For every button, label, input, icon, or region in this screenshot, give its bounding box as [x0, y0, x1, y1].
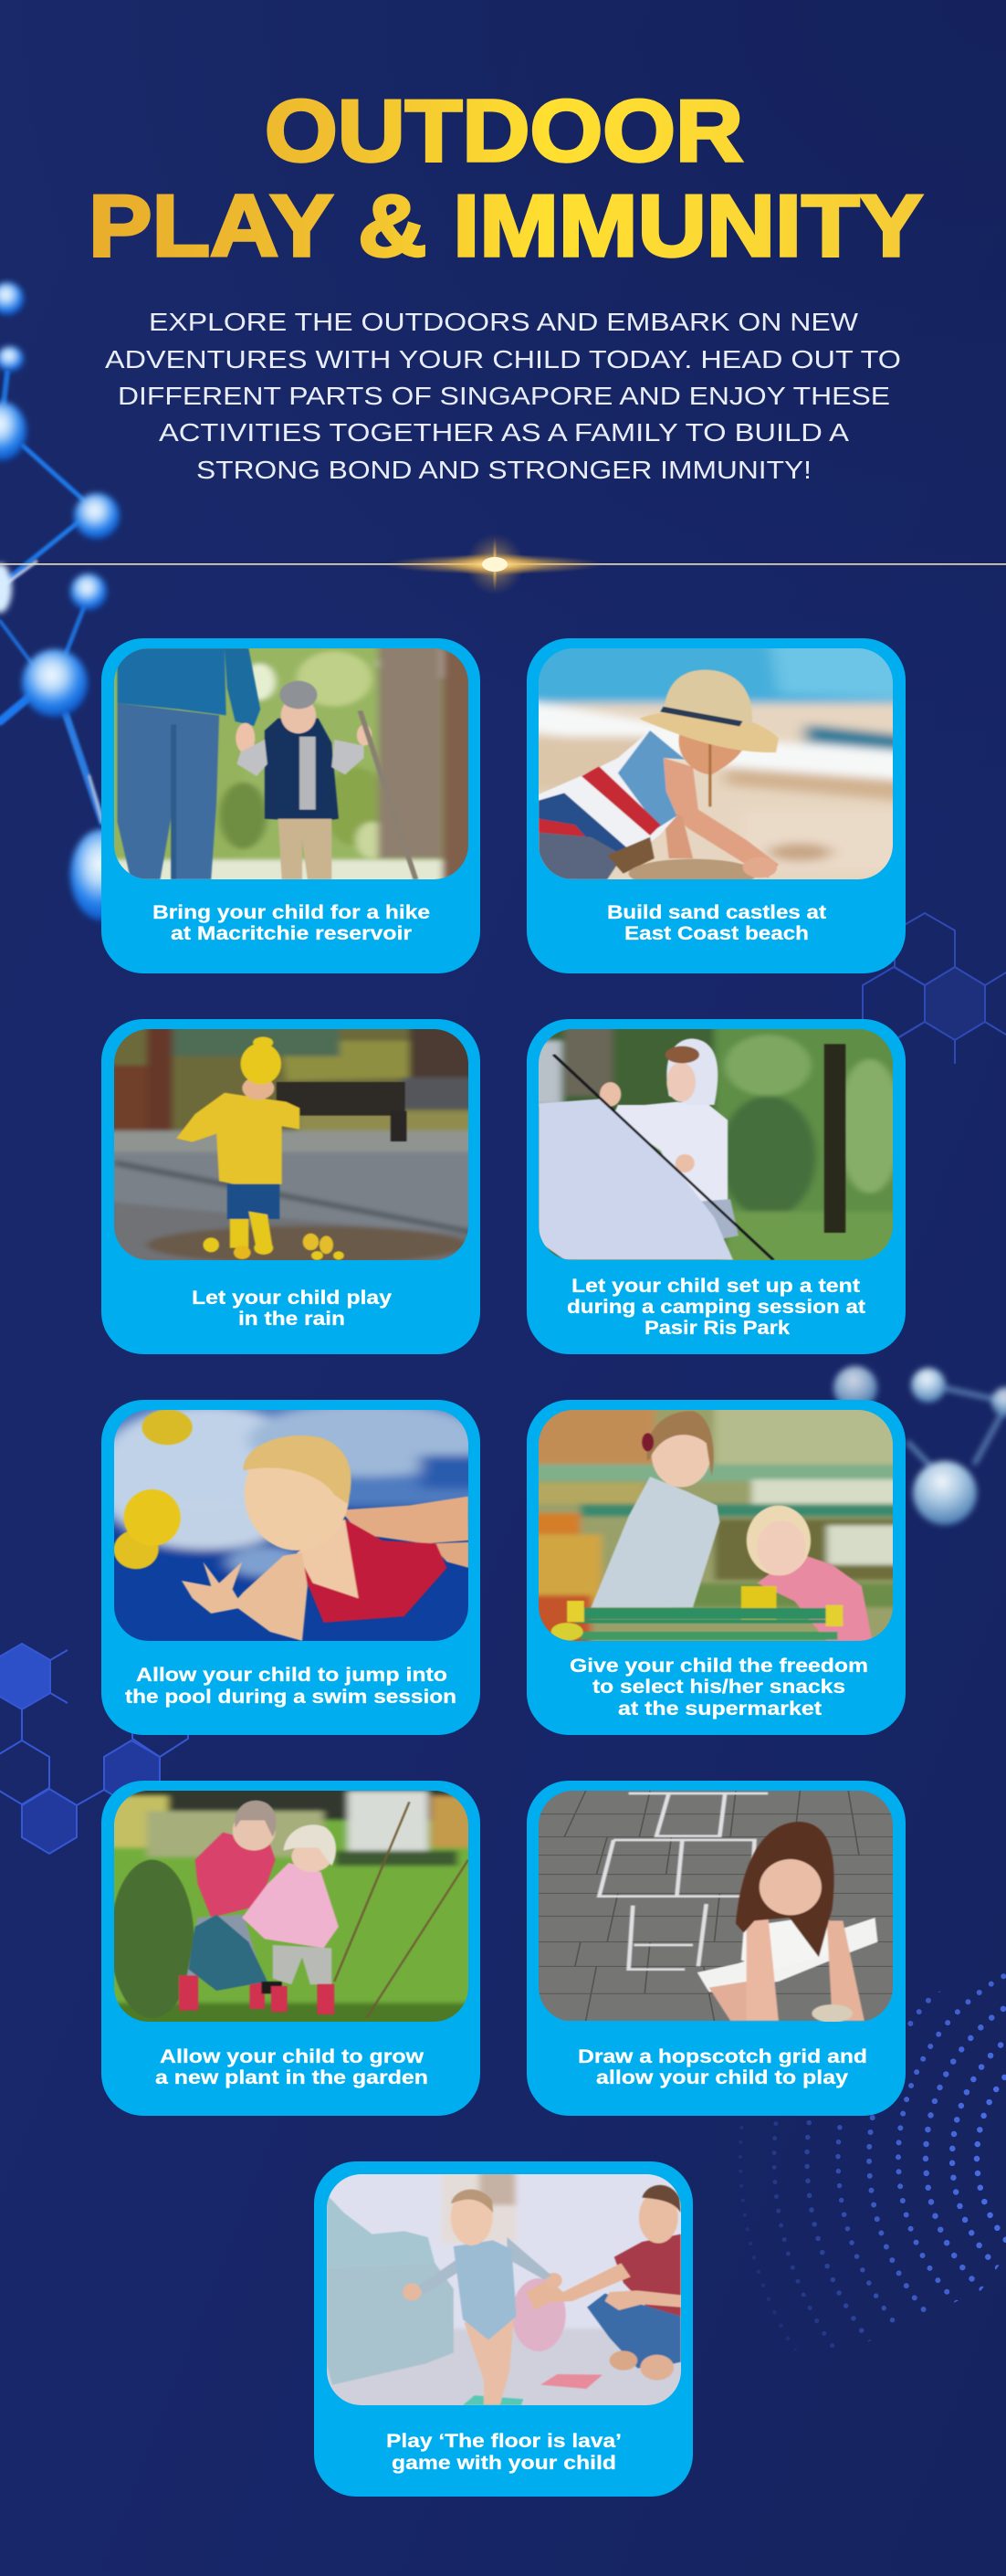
intro text: ACTIVITIES TOGETHER AS A FAMILY TO BUILD A — [159, 418, 849, 447]
photo: girl by a chalk hopscotch grid — [539, 1791, 894, 2023]
decoration: right hexagons — [863, 913, 1006, 1064]
decoration: right molecule — [833, 1366, 1006, 1525]
caption — [192, 1288, 392, 1330]
caption — [567, 1276, 865, 1339]
caption: Bring your child for a hike — [152, 902, 430, 923]
caption — [152, 902, 430, 944]
photo: child swimming underwater — [114, 1410, 468, 1641]
caption — [155, 2046, 428, 2088]
intro text: STRONG BOND AND STRONGER IMMUNITY! — [196, 456, 812, 484]
photo: children watering a plant — [114, 1791, 468, 2022]
caption: Pasir Ris Park — [644, 1318, 790, 1339]
caption: the pool during a swim session — [125, 1687, 456, 1708]
caption: allow your child to play — [596, 2067, 848, 2088]
decoration: dotted rings — [738, 1973, 1006, 2350]
intro text: ADVENTURES WITH YOUR CHILD TODAY. HEAD OUT TO — [105, 345, 901, 373]
photo: child pitching a tent — [539, 1029, 893, 1260]
caption: game with your child — [392, 2453, 616, 2474]
card: garden — [101, 1781, 480, 2116]
caption — [578, 2046, 867, 2088]
caption — [125, 1665, 456, 1708]
card: supermarket — [527, 1400, 906, 1735]
card: sand castles — [527, 638, 906, 973]
title: PLAY & IMMUNITY — [89, 177, 923, 275]
photo: child on the beach — [539, 648, 893, 879]
card: hopscotch — [527, 1781, 906, 2116]
photo: father and child hiking — [114, 648, 468, 879]
caption: Allow your child to jump into — [136, 1665, 447, 1686]
caption: Draw a hopscotch grid and — [578, 2046, 867, 2067]
caption — [386, 2431, 622, 2474]
caption: Let your child play — [192, 1288, 392, 1309]
caption: in the rain — [238, 1309, 345, 1330]
photo: baby walking toward father — [327, 2174, 681, 2405]
caption: a new plant in the garden — [155, 2067, 428, 2088]
caption: during a camping session at — [567, 1297, 865, 1318]
card: rain — [101, 1019, 480, 1354]
intro text: DIFFERENT PARTS OF SINGAPORE AND ENJOY THESE — [118, 382, 890, 410]
card: pool — [101, 1400, 480, 1735]
caption — [570, 1656, 868, 1719]
caption — [607, 902, 826, 944]
photo: child in yellow raincoat — [114, 1029, 468, 1260]
decoration: left hexagons — [0, 1644, 188, 1854]
photo: two girls with shopping trolley — [539, 1410, 893, 1641]
caption: Let your child set up a tent — [571, 1276, 860, 1297]
intro text — [105, 308, 901, 484]
card: floor is lava — [298, 2155, 707, 2497]
caption: at the supermarket — [618, 1698, 822, 1719]
caption: to select his/her snacks — [592, 1677, 845, 1698]
intro text: EXPLORE THE OUTDOORS AND EMBARK ON NEW — [149, 308, 859, 336]
title: OUTDOOR — [265, 82, 743, 180]
caption: Allow your child to grow — [160, 2046, 424, 2067]
card: hike — [101, 638, 480, 973]
caption: at Macritchie reservoir — [171, 923, 412, 944]
caption: East Coast beach — [624, 923, 809, 944]
gold divider with flare — [0, 533, 1006, 595]
title — [89, 82, 923, 275]
caption: Give your child the freedom — [570, 1656, 868, 1677]
decoration: left molecule — [0, 282, 134, 920]
caption: Play ‘The floor is lava’ — [386, 2431, 622, 2452]
card: tent — [527, 1019, 906, 1354]
caption: Build sand castles at — [607, 902, 826, 923]
